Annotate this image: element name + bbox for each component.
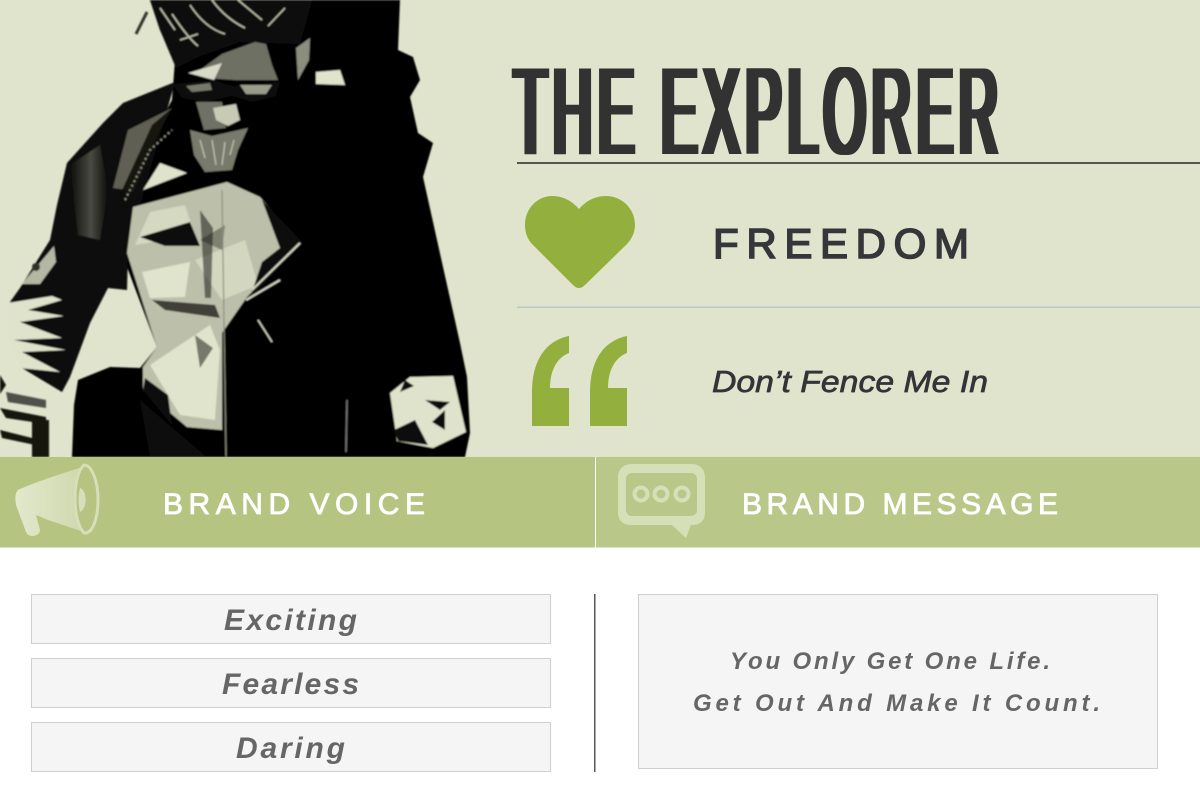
panel: voice trait Fearless: Fearless bbox=[222, 668, 359, 701]
right hand bbox=[390, 376, 466, 448]
hair bbox=[150, 0, 312, 68]
icon: speech bubble bbox=[618, 464, 705, 538]
left hand and pole bbox=[0, 375, 49, 457]
stray hair strand bbox=[136, 12, 147, 34]
right quote mark bbox=[590, 336, 627, 426]
panel: voice trait Exciting bbox=[32, 594, 550, 644]
panel: brand message box bbox=[638, 594, 1158, 768]
upper sleeve sheen bbox=[70, 145, 108, 240]
zipper dots bbox=[125, 130, 172, 200]
column divider bbox=[594, 594, 596, 772]
icon: megaphone bbox=[15, 465, 98, 536]
sleeve highlights bbox=[7, 246, 66, 372]
jacket glints bbox=[246, 243, 347, 452]
panel: voice trait Exciting: Exciting bbox=[224, 604, 357, 637]
quote text: Don’t Fence Me In bbox=[712, 364, 988, 399]
shirt bbox=[127, 182, 300, 430]
panel: hero background bbox=[0, 0, 1200, 457]
panel: voice trait Daring bbox=[32, 722, 550, 772]
left sleeve bbox=[8, 82, 175, 392]
heading: brand message: BRAND MESSAGE bbox=[742, 488, 1058, 521]
icon: heart bbox=[525, 196, 635, 288]
shirt folds bbox=[135, 205, 258, 420]
backpack light gap bbox=[316, 70, 345, 85]
divider bbox=[517, 306, 1200, 308]
photo: explorer with backpack bbox=[0, 0, 470, 457]
heading: brand voice: BRAND VOICE bbox=[163, 488, 425, 521]
backpack and torso silhouette bbox=[72, 0, 470, 457]
message line 2: Get Out And Make It Count. bbox=[693, 690, 1100, 717]
panel: voice trait Daring: Daring bbox=[236, 732, 345, 765]
nose bbox=[213, 104, 240, 126]
zipper line bbox=[222, 190, 226, 456]
collar bbox=[143, 163, 187, 190]
sunglasses bbox=[172, 80, 280, 102]
band: brand voice bbox=[0, 457, 595, 548]
shoulder strap bbox=[113, 108, 172, 190]
beard bbox=[190, 128, 248, 172]
band: brand message bbox=[596, 457, 1200, 548]
title rule bbox=[517, 162, 1200, 164]
face bbox=[200, 42, 278, 80]
message line 1: You Only Get One Life. bbox=[730, 648, 1050, 675]
value label: FREEDOM bbox=[713, 220, 969, 267]
icon: quotation marks bbox=[532, 336, 627, 426]
left quote mark bbox=[532, 336, 569, 426]
panel: voice trait Fearless bbox=[32, 658, 550, 708]
